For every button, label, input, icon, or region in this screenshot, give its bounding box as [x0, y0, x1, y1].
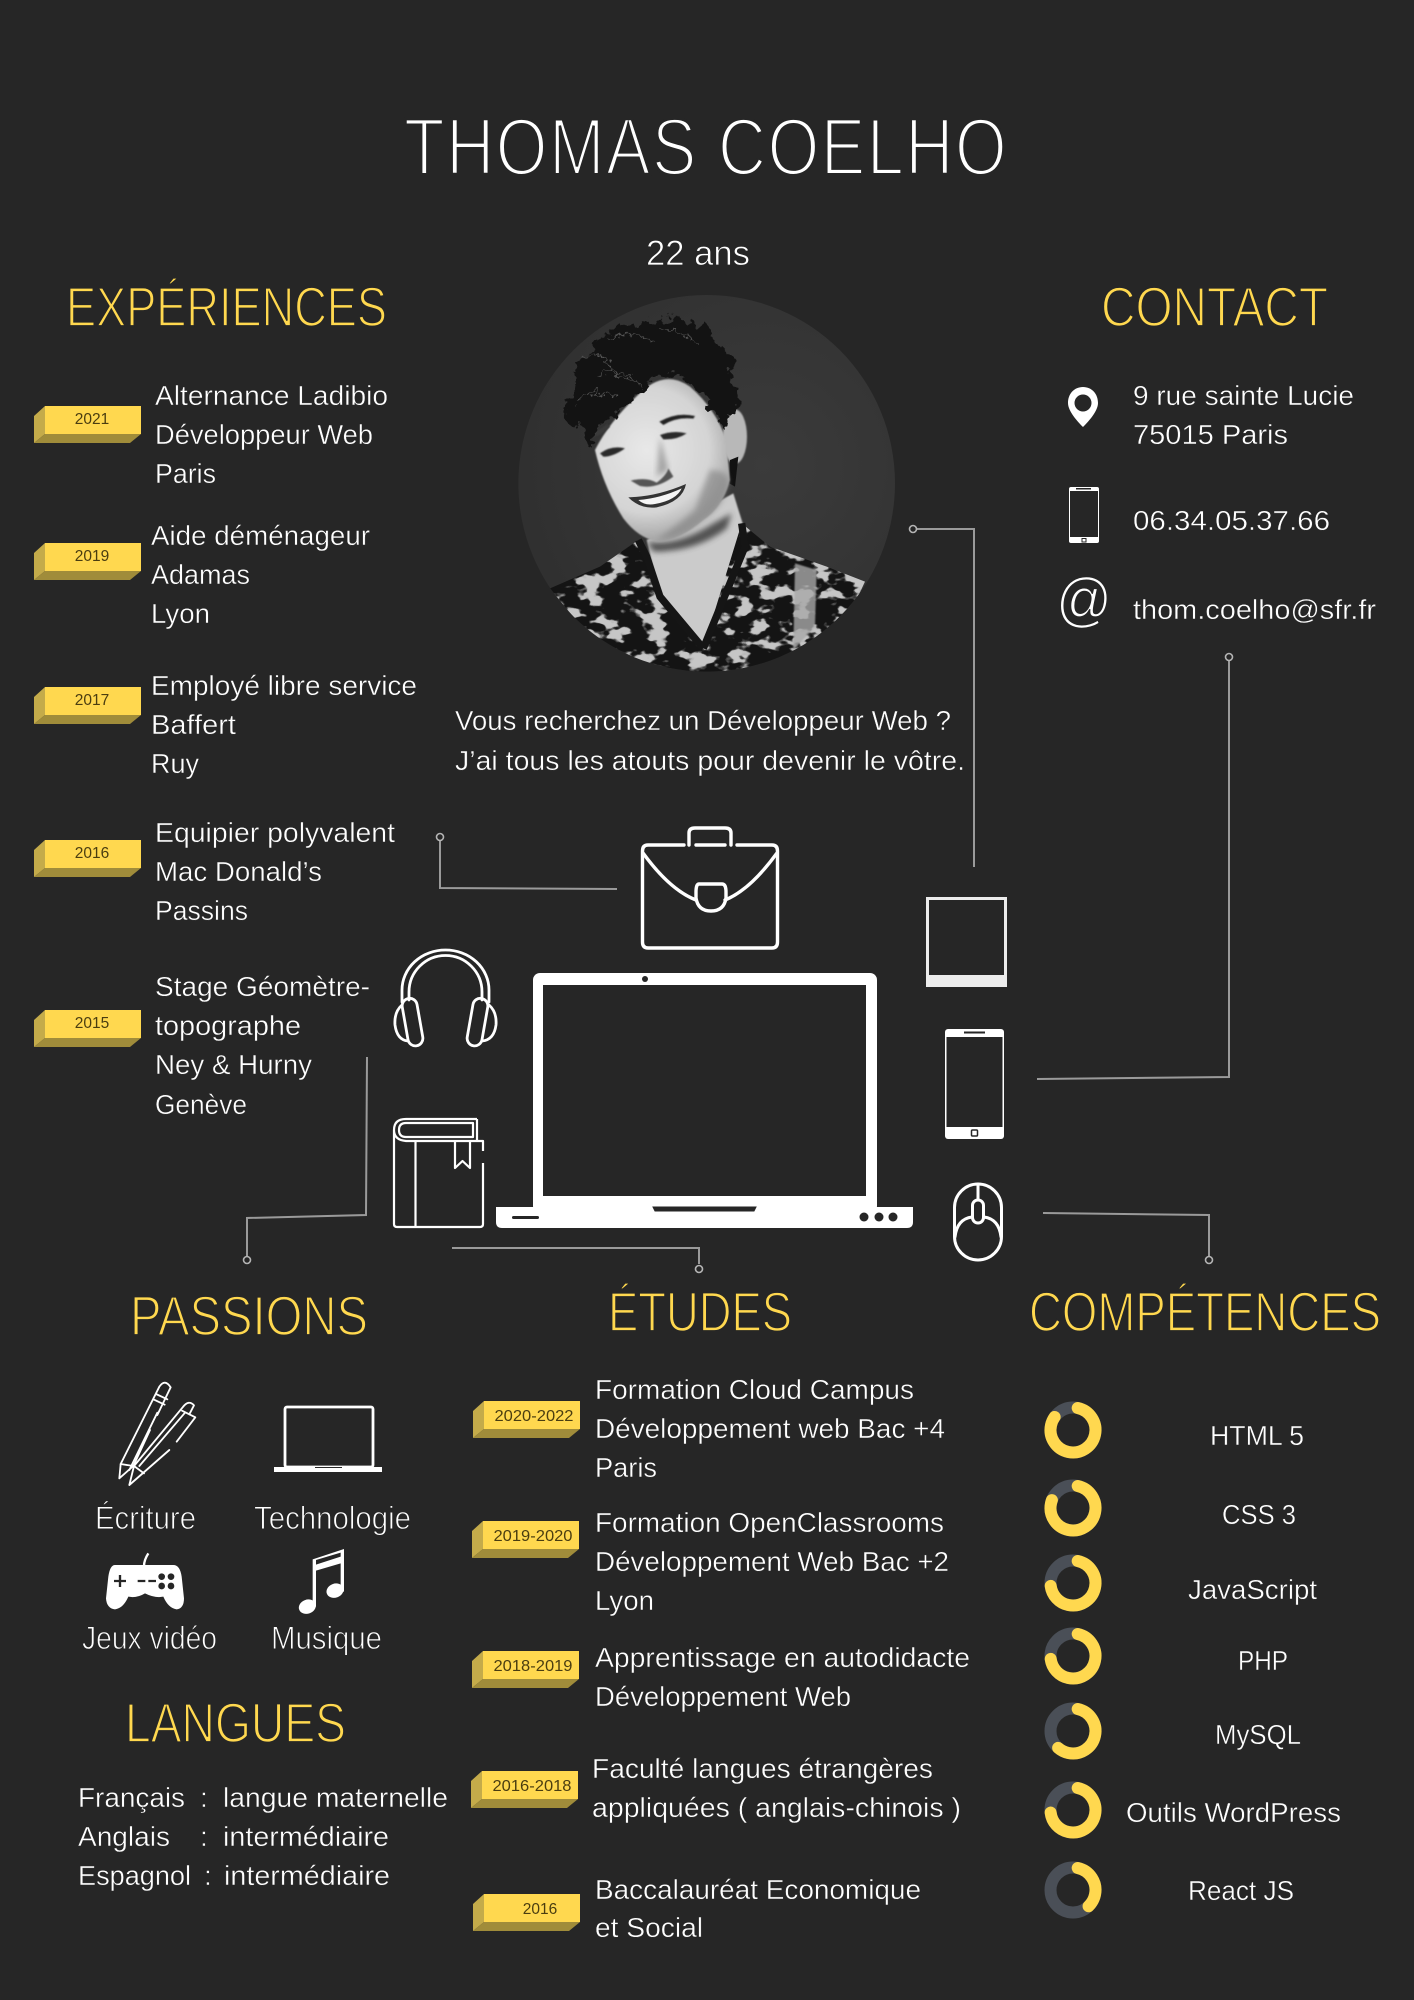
intro text: J’ai tous les atouts pour devenir le vôtre.: [455, 745, 965, 776]
skill css: CSS 3: [1222, 1499, 1296, 1530]
experience 2021: Paris: [155, 458, 216, 489]
skill php: [1046, 1629, 1288, 1683]
experience 2021: [34, 380, 388, 489]
panel: passions: [82, 1284, 411, 1656]
skill mysql: [1046, 1704, 1301, 1758]
connectors: [244, 526, 1232, 1272]
address: 9 rue sainte Lucie: [1133, 380, 1354, 411]
espagnol: Espagnol: [78, 1860, 191, 1891]
address: 75015 Paris: [1133, 419, 1288, 450]
etude 2016: 2016: [523, 1901, 557, 1918]
address: [1133, 380, 1354, 450]
etude 2016: [473, 1874, 921, 1943]
heading: passions: PASSIONS: [130, 1284, 368, 1347]
heading: etudes: ÉTUDES: [608, 1280, 792, 1343]
skill html: HTML 5: [1210, 1420, 1304, 1451]
experience 2015: 2015: [75, 1015, 109, 1032]
skill wordpress: [1046, 1783, 1341, 1837]
experience 2021: Développeur Web: [155, 419, 373, 450]
icon: book: [394, 1119, 483, 1227]
etude 2020-2022: [473, 1374, 945, 1483]
etude 2019-2020: 2019-2020: [494, 1528, 573, 1545]
etude 2016-2018: Faculté langues étrangères: [592, 1753, 933, 1784]
etude 2018-2019: [472, 1642, 970, 1712]
etude 2018-2019: Apprentissage en autodidacte: [595, 1642, 970, 1673]
etude 2018-2019: Développement Web: [595, 1681, 851, 1712]
icon: mouse: [954, 1184, 1002, 1260]
experience 2017: Employé libre service: [151, 670, 417, 701]
etude 2020-2022: Développement web Bac +4: [595, 1413, 945, 1444]
heading: langues: LANGUES: [125, 1691, 346, 1754]
etude 2019-2020: [472, 1507, 949, 1616]
experience 2021: Alternance Ladibio: [155, 380, 388, 411]
anglais: intermédiaire: [223, 1821, 389, 1852]
etude 2019-2020: Formation OpenClassrooms: [595, 1507, 944, 1538]
email: thom.coelho@sfr.fr: [1133, 594, 1376, 625]
experience 2017: [34, 670, 417, 779]
experience 2016: Mac Donald’s: [155, 856, 322, 887]
experience 2019: [34, 520, 370, 629]
etude 2019-2020: Lyon: [595, 1585, 654, 1616]
anglais: [78, 1821, 389, 1852]
etude 2020-2022: Paris: [595, 1452, 657, 1483]
label: technologie: Technologie: [254, 1500, 411, 1536]
experience 2016: Equipier polyvalent: [155, 817, 395, 848]
etude 2016: Baccalauréat Economique: [595, 1874, 921, 1905]
experience 2016: Passins: [155, 895, 248, 926]
icon: mini laptop: [274, 1407, 382, 1472]
etude 2016-2018: 2016-2018: [492, 1778, 572, 1795]
espagnol: [78, 1860, 390, 1891]
skill react: React JS: [1188, 1875, 1294, 1906]
experience 2015: topographe: [155, 1010, 301, 1041]
skill html: [1046, 1403, 1304, 1457]
etude 2016-2018: appliquées ( anglais-chinois ): [592, 1792, 961, 1823]
etude 2019-2020: Développement Web Bac +2: [595, 1546, 949, 1577]
espagnol: :: [204, 1860, 212, 1891]
anglais: :: [200, 1821, 208, 1852]
anglais: Anglais: [78, 1821, 170, 1852]
etude 2020-2022: 2020-2022: [494, 1408, 574, 1425]
experience 2015: [34, 971, 370, 1120]
intro text: [455, 705, 965, 776]
panel: experiences: [34, 275, 417, 1120]
experience 2015: Ney & Hurny: [155, 1049, 312, 1080]
label: ecriture: Écriture: [95, 1500, 196, 1536]
panel: langues: [78, 1691, 448, 1891]
etude 2020-2022: Formation Cloud Campus: [595, 1374, 914, 1405]
phone number: 06.34.05.37.66: [1133, 505, 1330, 536]
label: musique: Musique: [271, 1620, 382, 1656]
panel: competences: [1029, 1280, 1381, 1917]
etude 2016: et Social: [595, 1912, 703, 1943]
icon: tablet: [926, 897, 1007, 987]
icon: laptop: [496, 973, 913, 1228]
experience 2017: Baffert: [151, 709, 236, 740]
portrait photo: [518, 295, 895, 680]
francais: langue maternelle: [223, 1782, 448, 1813]
etude 2018-2019: 2018-2019: [494, 1658, 572, 1675]
francais: :: [200, 1782, 208, 1813]
icon: phone: [1069, 487, 1099, 543]
skill php: PHP: [1238, 1645, 1288, 1676]
experience 2017: 2017: [75, 692, 109, 709]
heading: contact: CONTACT: [1101, 275, 1328, 338]
icon: at sign: @: [1056, 566, 1112, 633]
label: jeux video: Jeux vidéo: [82, 1620, 217, 1656]
experience 2019: Adamas: [151, 559, 250, 590]
skill mysql: MySQL: [1215, 1719, 1301, 1750]
experience 2019: Aide déménageur: [151, 520, 370, 551]
experience 2021: 2021: [75, 411, 109, 428]
skill javascript: JavaScript: [1188, 1574, 1317, 1605]
experience 2015: Stage Géomètre-: [155, 971, 370, 1002]
francais: [78, 1782, 448, 1813]
title: THOMAS COELHO: [404, 101, 1007, 192]
skill javascript: [1046, 1556, 1317, 1610]
experience 2016: [34, 817, 395, 926]
etude 2016-2018: [471, 1753, 961, 1823]
francais: Français: [78, 1782, 185, 1813]
intro text: Vous recherchez un Développeur Web ?: [455, 705, 951, 736]
icon: location pin: [1068, 387, 1098, 427]
icon: gamepad: [106, 1553, 184, 1609]
experience 2016: 2016: [75, 845, 109, 862]
heading: experiences: EXPÉRIENCES: [66, 275, 387, 338]
skill wordpress: Outils WordPress: [1126, 1797, 1341, 1828]
icon: music note: [297, 1549, 346, 1616]
icon: pencils: [119, 1383, 195, 1485]
icon: briefcase: [642, 828, 778, 948]
icon: smartphone: [945, 1029, 1004, 1139]
skill react: [1046, 1863, 1294, 1917]
age: 22 ans: [646, 234, 750, 273]
experience 2019: 2019: [75, 548, 109, 565]
panel: etudes: [471, 1280, 970, 1943]
icon: headphones: [395, 950, 496, 1047]
experience 2015: Genève: [155, 1089, 247, 1120]
experience 2019: Lyon: [151, 598, 210, 629]
experience 2017: Ruy: [151, 748, 199, 779]
skill css: [1046, 1481, 1296, 1535]
espagnol: intermédiaire: [224, 1860, 390, 1891]
panel: contact: [1056, 275, 1376, 633]
